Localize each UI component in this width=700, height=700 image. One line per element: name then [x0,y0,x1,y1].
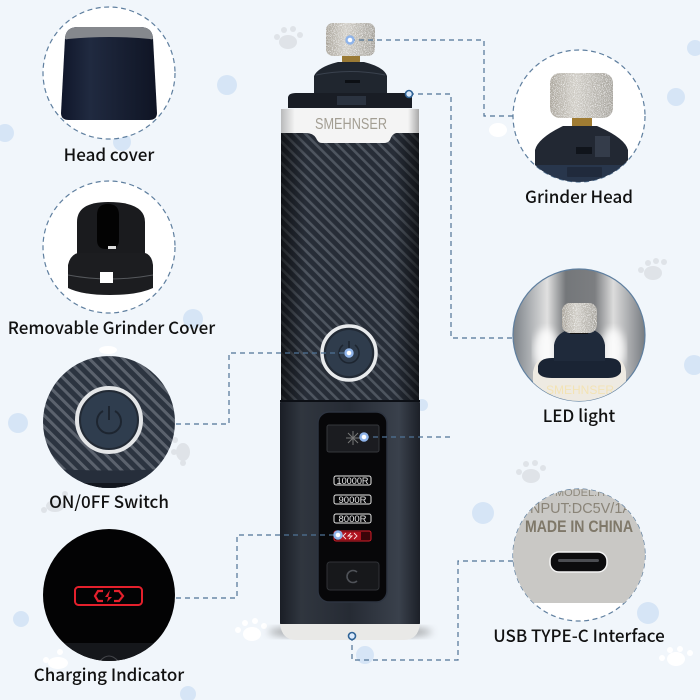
logo mark [347,570,357,583]
icon: usb-c port photo [510,487,650,603]
callout points [334,36,412,640]
panel: charging indicator [34,529,184,686]
grinding stone [326,23,375,63]
display panel [318,412,387,602]
label: usb type-c: USB TYPE-C Interface [493,622,665,647]
power button [322,326,376,380]
icon: usb-c port photo: MADE IN CHINA [525,517,633,536]
speed labels: 8000R [338,514,367,525]
icon: led head detail: SMEHNSER [546,383,614,397]
silver band with brand: SMEHNSER [315,116,387,133]
head collar [288,62,412,108]
panel: on/off switch [40,356,180,513]
panel: usb type-c [493,487,665,647]
icon: grinder head detail [535,73,628,182]
panel: removable grinder cover [8,181,215,339]
panel: head cover [43,7,175,166]
red battery indicator [334,531,371,541]
label: led light: LED light [543,402,615,427]
icon: usb-c port photo: INPUT:DC5V/1A [526,500,632,517]
upper body with diagonal ribs [281,125,419,401]
label: on/off switch: ON/0FF Switch [49,488,169,513]
icon: red battery [75,587,142,605]
panel: led light [513,269,645,427]
speed labels: 10000R [336,476,369,487]
leader lines [176,40,513,660]
label: charging indicator: Charging Indicator [34,661,184,686]
icon: grinder cover [68,202,153,295]
panel: grinder head [513,50,645,208]
speed labels: 9000R [338,495,367,506]
lower body [280,400,420,626]
label: removable grinder cover: Removable Grinder Cover [8,314,215,339]
label: head cover: Head cover [64,141,154,166]
icon: usb-c port photo: MODEL:H [555,487,605,499]
icon: power button [77,388,141,452]
base silver ring [280,624,420,640]
silver band with brand [281,108,419,143]
LED mark [346,431,360,445]
icon: head cover cap [61,27,157,120]
speed labels [334,476,371,525]
label: grinder head: Grinder Head [525,183,633,208]
device: nail grinder [268,23,432,640]
base shadow [268,626,432,638]
